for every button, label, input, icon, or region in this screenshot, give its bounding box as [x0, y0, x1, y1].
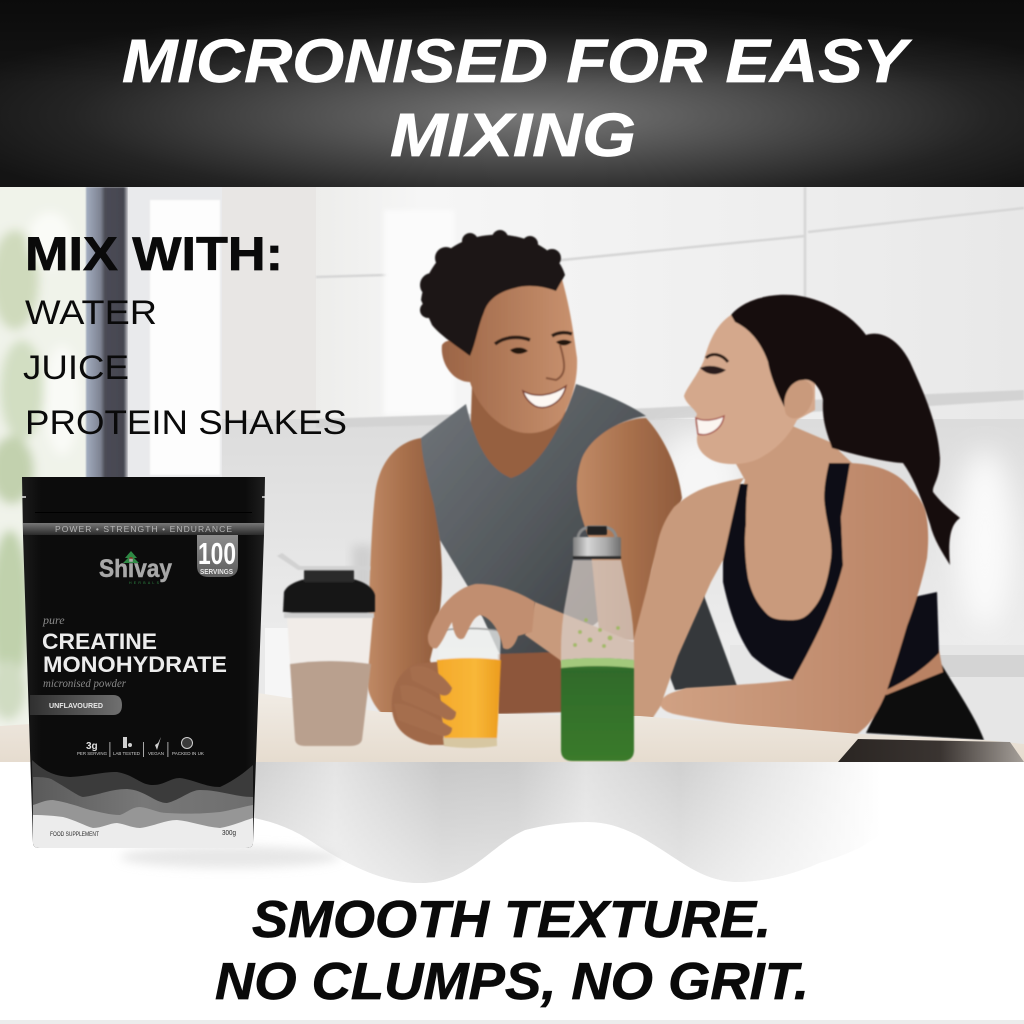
pouch feature icons: PACKED IN UK: [172, 751, 204, 756]
pouch product name: pure: [42, 613, 65, 627]
mix with heading: MIX WITH:: [25, 227, 283, 280]
pouch feature icons: PER SERVING: [77, 751, 107, 756]
midriff: [880, 650, 943, 695]
list item protein shakes: PROTEIN SHAKES: [25, 404, 347, 442]
photo: table top: [0, 693, 1024, 762]
pouch flavour pill: UNFLAVOURED: [49, 701, 104, 710]
ponytail and hair: [731, 295, 960, 565]
hair: [420, 230, 565, 356]
black leggings: [866, 660, 984, 740]
photo: man's hand holding glass: [392, 660, 500, 745]
list item water: WATER: [25, 294, 157, 332]
pouch feature icons: [77, 737, 204, 757]
pouch brand logo: Shivay: [99, 555, 172, 583]
face: [442, 272, 577, 433]
sports bra: [723, 463, 939, 690]
pouch wave layers: [32, 760, 253, 848]
woman's ear: [784, 380, 813, 418]
man's right arm: [577, 418, 682, 640]
pouch feature icons: 3g: [86, 741, 98, 752]
photo: protein shaker: [277, 553, 375, 746]
pouch footer text: 300g: [222, 830, 236, 837]
product pouch: POWER • STRENGTH • ENDURANCE: [55, 524, 232, 534]
pouch flavour pill: [30, 695, 122, 715]
woman's near arm: [525, 478, 744, 724]
woman's far arm: [660, 463, 928, 739]
neck and chest: [723, 425, 852, 682]
list item juice: JUICE: [23, 349, 129, 387]
forearm behind glass: [498, 652, 570, 714]
photo: woman: [525, 295, 984, 740]
photo: man: [366, 230, 737, 722]
man's neck: [470, 385, 568, 486]
photo: kitchen background: [0, 180, 1024, 762]
product pouch: [22, 477, 265, 848]
header title: [122, 27, 913, 169]
pouch brand logo: HERBALS: [129, 581, 160, 585]
man's features: [495, 333, 572, 408]
bottom wave band: [254, 762, 880, 883]
photo: dark phone on table: [838, 739, 1024, 762]
bottom tagline: [215, 891, 809, 1011]
pouch servings badge: [197, 535, 238, 577]
woman's features: [696, 355, 728, 435]
tank top: [421, 384, 646, 655]
pouch footer text: FOOD SUPPLEMENT: [50, 831, 99, 838]
bottom edge strip: [0, 1020, 1024, 1024]
pouch product name: MONOHYDRATE: [43, 652, 227, 677]
woman's face: [684, 310, 815, 464]
pouch feature icons: VEGAN: [148, 751, 164, 756]
header title: MICRONISED FOR EASY: [122, 27, 913, 95]
pouch soft shadow: [120, 846, 340, 868]
pouch feature icons: LAB TESTED: [113, 751, 140, 756]
photo: woman's hand on glass: [428, 584, 535, 649]
pouch top strip: [23, 523, 264, 535]
photo: glass of orange juice: [437, 628, 501, 748]
photo: green smoothie bottle: [561, 526, 634, 761]
pouch servings badge: 100: [198, 536, 236, 571]
pouch servings badge: SERVINGS: [200, 567, 233, 576]
pouch product name: CREATINE: [42, 629, 157, 654]
bottom tagline: SMOOTH TEXTURE.: [252, 891, 771, 949]
man's left arm: [366, 438, 442, 722]
bottom tagline: NO CLUMPS, NO GRIT.: [215, 953, 809, 1011]
mix with list: [23, 227, 347, 442]
man's back and shirt lower: [640, 585, 737, 690]
pouch footer text: [50, 830, 236, 838]
header title: MIXING: [390, 101, 636, 169]
pouch product name: [42, 613, 227, 690]
header banner: [0, 0, 1024, 187]
pouch product name: micronised powder: [43, 676, 126, 690]
photo: man's fingers on glass: [394, 666, 456, 736]
